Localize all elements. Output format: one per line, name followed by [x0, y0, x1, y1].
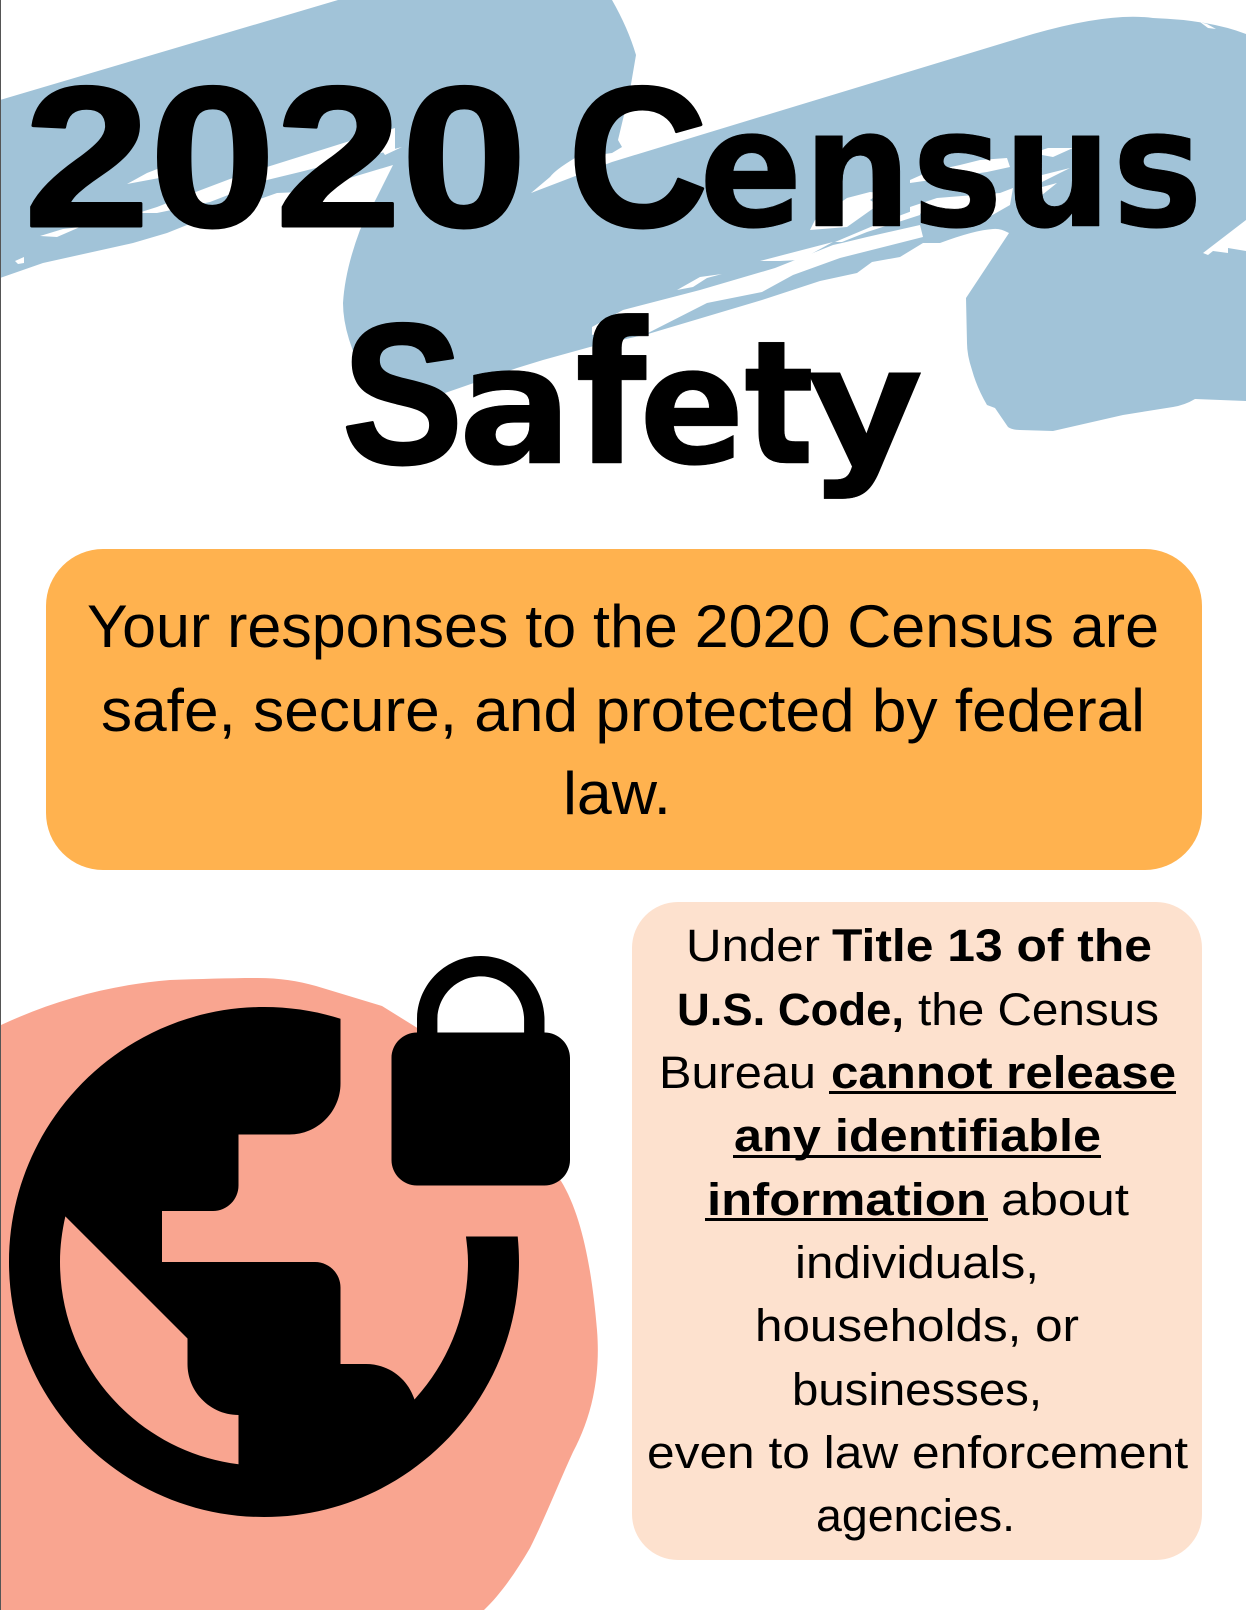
explanation text: businesses,: [792, 1364, 1042, 1415]
title line 2: S: [342, 283, 463, 506]
title line 1: C: [568, 46, 708, 269]
title line 2: y: [806, 310, 924, 502]
title line 2: e: [639, 310, 745, 502]
title line 1: 2020: [24, 46, 527, 269]
explanation text: agencies.: [816, 1490, 1015, 1541]
title line 2: f: [575, 281, 649, 510]
statement text: Your responses to the 2020 Census are: [87, 593, 1159, 660]
title line 2: a: [458, 310, 573, 502]
explanation text: information: [707, 1174, 987, 1225]
explanation text: the Census: [918, 984, 1159, 1035]
panel: orange statement: [46, 549, 1202, 870]
statement text: law.: [563, 760, 671, 827]
explanation text: any identifiable: [734, 1110, 1101, 1161]
statement text: safe, secure, and protected by federal: [101, 677, 1145, 744]
icon: globe with padlock: [9, 956, 570, 1517]
explanation text: U.S. Code,: [677, 984, 904, 1035]
explanation text: even to law enforcement: [647, 1427, 1189, 1478]
explanation text: cannot release: [831, 1047, 1176, 1098]
explanation text: Under: [686, 920, 820, 971]
pink blob: [1, 978, 598, 1610]
explanation text: Bureau: [659, 1047, 816, 1098]
explanation text: households, or: [755, 1300, 1079, 1351]
panel: Title 13 explanation: [632, 902, 1202, 1560]
blue brush stroke background: [0, 0, 1246, 431]
title line 2: t: [744, 303, 814, 504]
title line 1: ensus: [699, 73, 1203, 265]
explanation text: Title 13 of the: [832, 920, 1152, 971]
explanation text: about: [1001, 1174, 1130, 1225]
explanation text: individuals,: [795, 1237, 1039, 1288]
title: [24, 46, 1203, 510]
